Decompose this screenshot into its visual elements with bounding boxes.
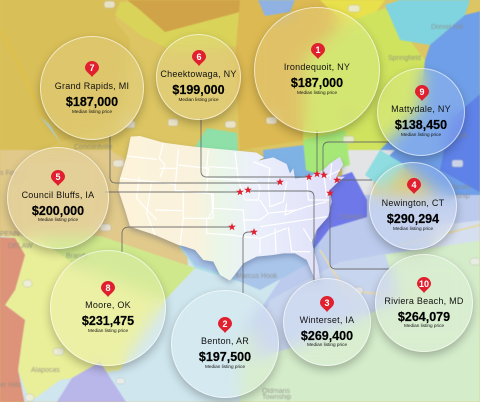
background map: more — [340, 114, 356, 121]
price caption: Median listing price — [297, 90, 337, 95]
background map: Township — [262, 394, 291, 401]
city name: Winterset, IA — [300, 315, 354, 325]
city name: Council Bluffs, IA — [22, 190, 94, 200]
pin 9 — [415, 85, 429, 101]
pin 9: 9 — [419, 87, 425, 97]
pin 10 — [417, 277, 431, 293]
price caption: Median listing price — [401, 132, 441, 137]
background map: PENN — [0, 231, 19, 238]
price: $264,079 — [398, 310, 450, 324]
city circle 4: Newington — [369, 162, 457, 250]
price caption: Median listing price — [88, 328, 128, 333]
price caption: Median listing price — [205, 364, 245, 369]
price: $187,000 — [291, 76, 343, 90]
city circle 1: Irondequoit — [254, 7, 380, 133]
price: $197,500 — [199, 350, 251, 364]
price caption: Median listing price — [72, 109, 112, 114]
pin 7 — [85, 61, 99, 77]
price caption: Median listing price — [178, 97, 219, 102]
pin 6: 6 — [196, 52, 202, 62]
city name: Benton, AR — [201, 336, 249, 346]
price: $199,000 — [172, 83, 225, 97]
pin 8 — [101, 281, 115, 297]
price: $138,450 — [395, 118, 447, 132]
price caption: Median listing price — [404, 323, 444, 328]
background map: wnship — [447, 193, 470, 200]
pin 4: 4 — [411, 180, 417, 190]
pin 8: 8 — [105, 283, 111, 293]
background map: Drexel Hill — [431, 24, 463, 31]
city name: Newington, CT — [382, 198, 444, 208]
city circle 10: Riviera Beach — [375, 254, 473, 352]
city name: Mattydale, NY — [391, 104, 451, 114]
city name: Moore, OK — [85, 300, 131, 310]
price caption: Median listing price — [393, 226, 433, 231]
background map: roft — [457, 133, 467, 140]
price caption: Median listing price — [38, 217, 78, 222]
city circle 7: Grand Rapids — [40, 36, 144, 140]
city name: Riviera Beach, MD — [384, 296, 464, 306]
price: $290,294 — [387, 212, 439, 226]
pin 2: 2 — [222, 319, 228, 329]
pin 2 — [218, 317, 232, 333]
pin 10: 10 — [419, 279, 429, 289]
background map: Alapocas — [31, 367, 60, 374]
background map: Oldmans — [262, 388, 291, 395]
background map: Concordville — [74, 144, 113, 151]
price caption: Median listing price — [307, 342, 347, 347]
background map: nicum — [452, 184, 471, 191]
background map: er Hills — [0, 382, 22, 389]
background map: DELAW — [8, 243, 33, 250]
pin 3 — [320, 296, 334, 312]
background map: Brandy — [66, 253, 89, 260]
pin 1 — [311, 43, 325, 59]
price: $200,000 — [32, 204, 84, 218]
city circle 6: Cheektowaga — [156, 34, 241, 120]
background map: Chester — [339, 214, 364, 221]
pin 6 — [192, 50, 206, 66]
price: $187,000 — [66, 95, 118, 109]
city circle 8: Moore — [50, 250, 166, 366]
city circle 3: Winterset — [283, 278, 371, 366]
city name: Grand Rapids, MI — [55, 81, 129, 91]
pin 4 — [407, 178, 421, 194]
city name: Cheektowaga, NY — [160, 69, 237, 79]
pin 5 — [51, 170, 65, 186]
pin 5: 5 — [55, 172, 61, 182]
price: $269,400 — [301, 329, 353, 343]
city circle 9: Mattydale — [377, 68, 465, 156]
background map: Marcus Hook — [236, 273, 278, 280]
pin 7: 7 — [89, 63, 95, 73]
background map: Springfield — [388, 55, 421, 62]
pin 3: 3 — [324, 298, 330, 308]
city circle 2: Benton — [171, 290, 279, 398]
city circle 5: Council Bluffs — [7, 147, 109, 249]
price: $231,475 — [82, 314, 134, 328]
city name: Irondequoit, NY — [284, 62, 350, 72]
pin 1: 1 — [315, 45, 321, 55]
background map: s Forl — [0, 170, 18, 177]
